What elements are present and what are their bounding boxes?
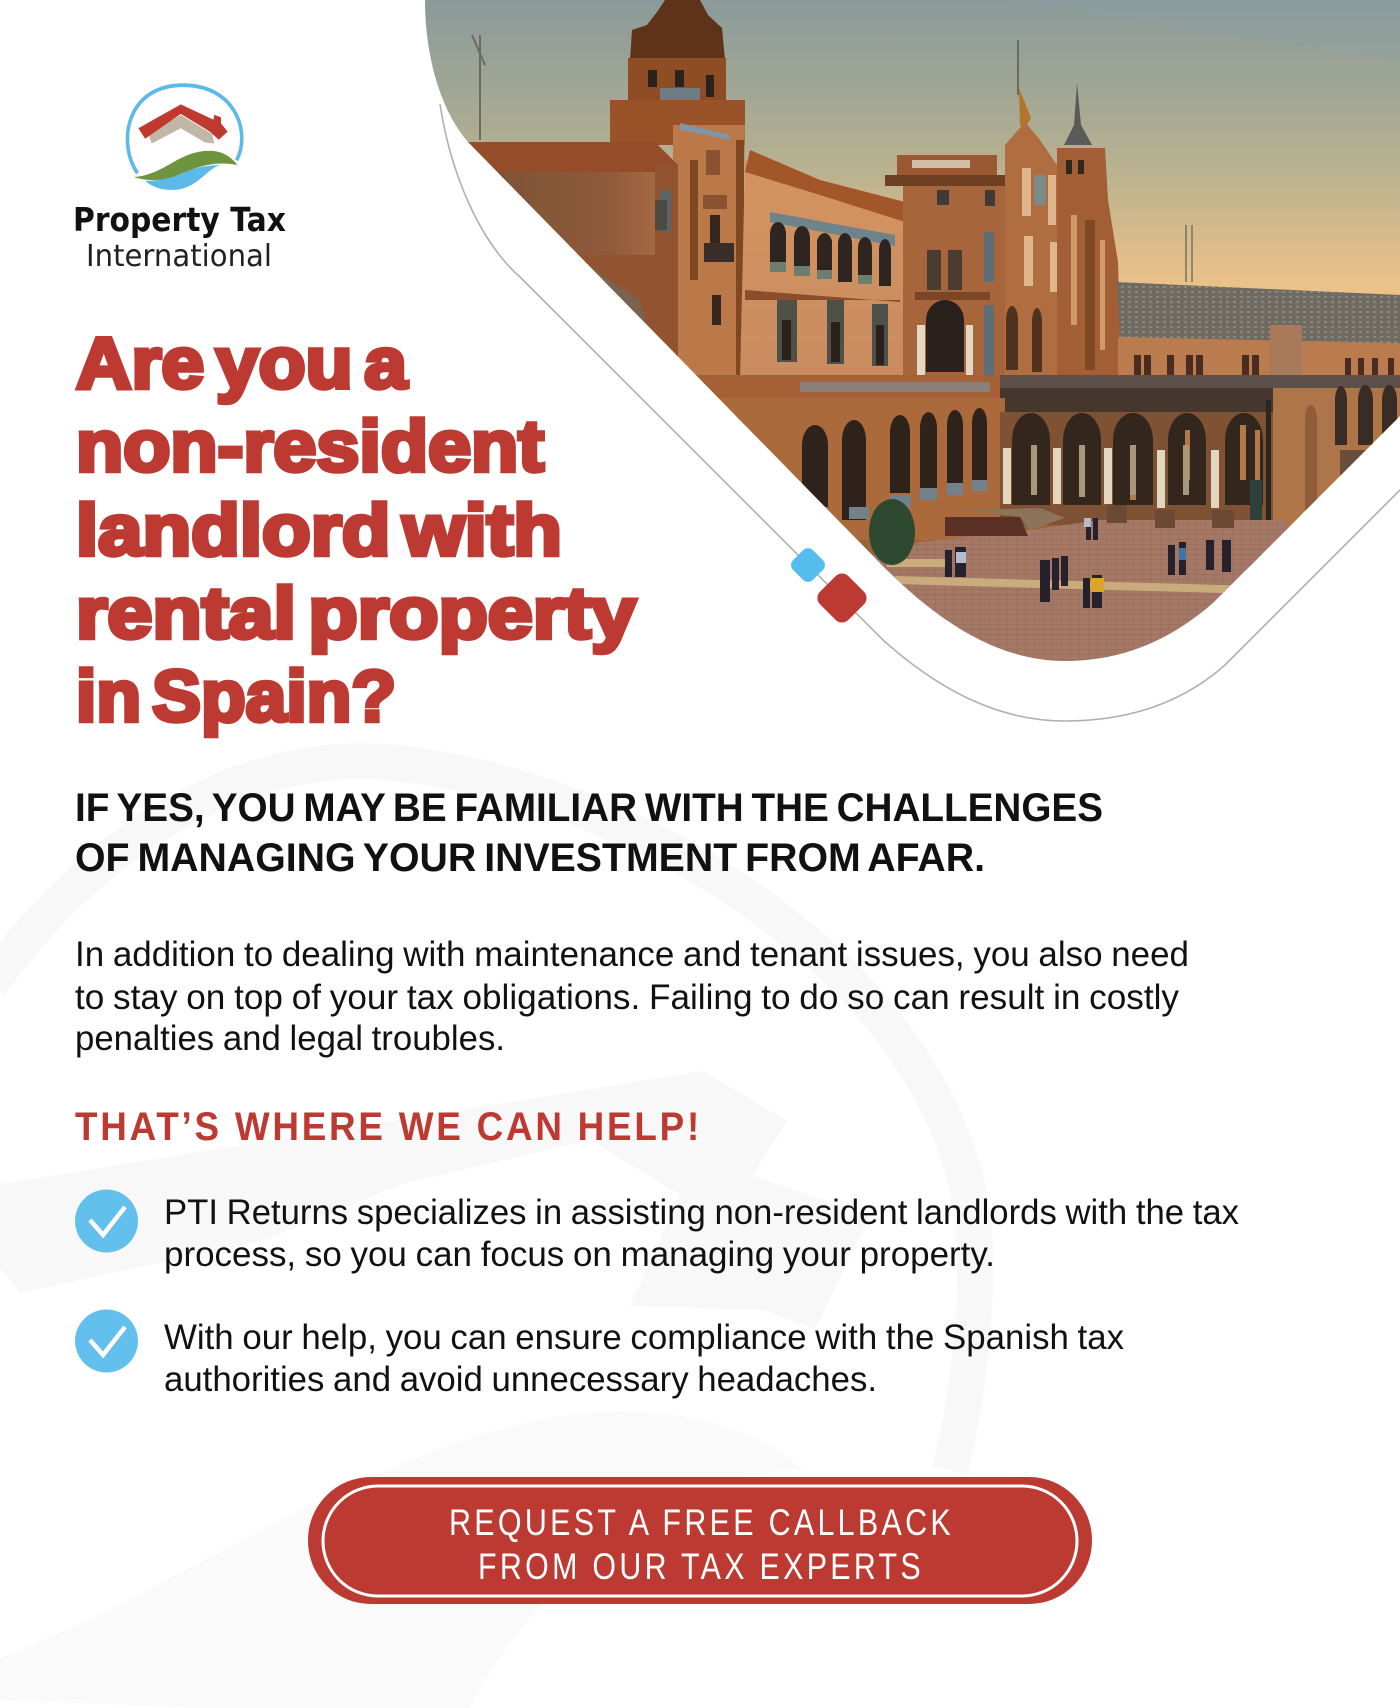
- benefit 2: [75, 1310, 1124, 1399]
- benefit text 1: [164, 1193, 1239, 1274]
- subheading: OF MANAGING YOUR INVESTMENT FROM AFAR.: [75, 836, 985, 880]
- section heading: THAT’S WHERE WE CAN HELP!: [75, 1105, 702, 1149]
- main headline: [76, 324, 636, 737]
- people: [945, 518, 1231, 608]
- antenna and flag: [472, 35, 1018, 140]
- curved outline around photo: [440, 104, 1400, 721]
- central pavilion: [897, 155, 997, 175]
- lower arches: [802, 408, 987, 520]
- main headline: in Spain?: [76, 657, 396, 737]
- gable tower: [1005, 122, 1057, 385]
- icon: check 1: [75, 1190, 138, 1252]
- main headline: Are you a: [76, 324, 408, 404]
- subheading: IF YES, YOU MAY BE FAMILIAR WITH THE CHALLENGES: [75, 786, 1103, 830]
- benefit text 1: PTI Returns specializes in assisting non-resident landlords with the tax: [164, 1193, 1239, 1232]
- benefit text 2: authorities and avoid unnecessary headaches.: [164, 1360, 877, 1399]
- intro paragraph: [75, 935, 1189, 1058]
- tower upper crown: [630, 0, 725, 60]
- lower wall band: [1118, 337, 1400, 375]
- benefit text 1: process, so you can focus on managing your property.: [164, 1235, 995, 1274]
- call-to-action button: FROM OUR TAX EXPERTS: [478, 1546, 924, 1587]
- intro paragraph: In addition to dealing with maintenance and tenant issues, you also need: [75, 935, 1189, 974]
- tiled roof: [1117, 282, 1400, 345]
- benefit text 2: With our help, you can ensure compliance with the Spanish tax: [164, 1318, 1124, 1357]
- centre wing upper: [740, 160, 905, 380]
- benefit 1: [75, 1190, 1239, 1274]
- background watermark logo: [0, 761, 975, 1708]
- logo subtitle: International: [86, 239, 272, 274]
- plaza: [873, 520, 1290, 661]
- tree: [869, 499, 915, 565]
- white columns: [1003, 448, 1219, 508]
- balustrade: [700, 378, 1000, 400]
- call-to-action button: [308, 1477, 1092, 1604]
- left wing: [460, 142, 678, 180]
- logo mark: [127, 85, 242, 190]
- call-to-action button: REQUEST A FREE CALLBACK: [449, 1502, 954, 1543]
- accent: red diamond: [814, 570, 870, 626]
- main headline: rental property: [76, 574, 636, 654]
- photo: Plaza de España, Seville: [420, 0, 1400, 700]
- steps: [945, 517, 1028, 536]
- tower shaft: [610, 100, 745, 145]
- intro paragraph: penalties and legal troubles.: [75, 1019, 505, 1058]
- logo: Property Tax International: [73, 85, 286, 274]
- sky: [420, 0, 1400, 450]
- lower arcade walls: [718, 398, 1005, 540]
- subheading: [75, 786, 1103, 880]
- intro paragraph: to stay on top of your tax obligations. Failing to do so can result in costly: [75, 978, 1179, 1017]
- logo name: Property Tax: [73, 200, 286, 239]
- main headline: landlord with: [76, 491, 562, 571]
- accent: blue diamond: [788, 545, 828, 585]
- spire tower: [1064, 83, 1092, 145]
- building base fill: [660, 375, 1300, 570]
- benefit text 2: [164, 1318, 1124, 1399]
- icon: check 2: [75, 1310, 138, 1372]
- main headline: non-resident: [76, 407, 544, 487]
